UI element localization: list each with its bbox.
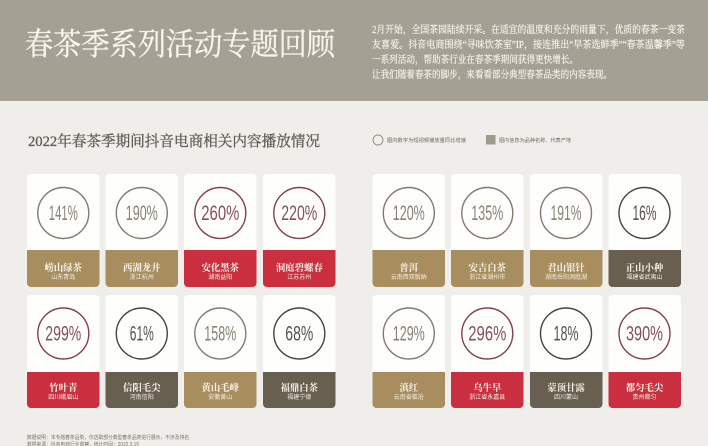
- card: 竹叶青: 竹叶青: [49, 382, 78, 394]
- card: 安吉白茶: 浙江省湖州市: [469, 273, 505, 281]
- card: 普洱: 云南西双版纳: [391, 273, 427, 281]
- card: 君山银针: 191%: [550, 202, 582, 225]
- card: 都匀毛尖: 都匀毛尖: [626, 382, 664, 394]
- card: 滇红: [372, 295, 445, 408]
- card: 安化黑茶: 260%: [201, 202, 239, 225]
- footnote: 数据说明：本专题春茶品类，仅选取部分典型春茶品类进行展示，不涉及排名: [27, 433, 189, 441]
- card: 蒙顶甘露: 四川蒙山: [554, 393, 578, 401]
- card: 安化黑茶: 安化黑茶: [202, 262, 240, 274]
- card: 洞庭碧螺春: 220%: [281, 202, 317, 225]
- card: 黄山毛峰: 安徽黄山: [208, 393, 232, 401]
- card: 西湖龙井: 西湖龙井: [123, 262, 161, 274]
- card: 信阳毛尖: 河南信阳: [130, 393, 154, 401]
- card: 乌牛早: 296%: [468, 323, 506, 346]
- card: 滇红: 云南省临沧: [394, 393, 424, 401]
- card: 福鼎白茶: 福鼎白茶: [281, 382, 319, 394]
- card: 正山小种: 正山小种: [626, 262, 664, 274]
- card: 崂山绿茶: [27, 174, 100, 287]
- card: 黄山毛峰: 黄山毛峰: [202, 382, 240, 394]
- intro paragraph: 一系列活动，帮助茶行业在春茶季期间获得更快增长。: [372, 53, 578, 66]
- card: 崂山绿茶: 山东青岛: [51, 273, 75, 281]
- card: 安化黑茶: 湖南益阳: [208, 273, 232, 281]
- card: 君山银针: [530, 174, 602, 287]
- card: 竹叶青: 299%: [45, 323, 81, 346]
- card: 都匀毛尖: 贵州都匀: [632, 393, 657, 401]
- card: 蒙顶甘露: [530, 295, 602, 408]
- card: 信阳毛尖: 信阳毛尖: [123, 382, 161, 394]
- card: 安吉白茶: [451, 174, 524, 287]
- legend text: circle: 圈内数字为短视频播放量同比增速: [387, 136, 467, 144]
- card: 乌牛早: [451, 295, 524, 408]
- card: 安吉白茶: 安吉白茶: [469, 262, 507, 274]
- card: 滇红: 129%: [393, 323, 425, 346]
- legend icon: square: [486, 135, 496, 144]
- section heading: 2022年春茶季期间抖音电商相关内容播放情况: [28, 132, 320, 150]
- card: 君山银针: 君山银针: [547, 262, 585, 274]
- header banner: [0, 0, 708, 101]
- card: 蒙顶甘露: 蒙顶甘露: [547, 382, 585, 394]
- card: 黄山毛峰: 158%: [204, 323, 236, 346]
- intro paragraph: 让我们随着春茶的脚步，来看看部分典型春茶品类的内容表现。: [372, 68, 612, 81]
- card: 西湖龙井: 190%: [126, 202, 158, 225]
- card: 福鼎白茶: 福建宁德: [287, 393, 311, 401]
- card: 普洱: 普洱: [399, 262, 419, 274]
- card: 普洱: 120%: [393, 202, 425, 225]
- card: 信阳毛尖: [106, 295, 178, 408]
- card: 洞庭碧螺春: 洞庭碧螺春: [276, 262, 323, 274]
- card: 洞庭碧螺春: [263, 174, 336, 287]
- card: 安化黑茶: [184, 174, 256, 287]
- card: 崂山绿茶: 141%: [49, 202, 78, 225]
- legend: [373, 135, 572, 145]
- card: 正山小种: [608, 174, 681, 287]
- card: 正山小种: 福建省武夷山: [626, 273, 663, 281]
- card: 安吉白茶: 135%: [471, 202, 503, 225]
- card: 洞庭碧螺春: 江苏苏州: [287, 273, 311, 281]
- card: 黄山毛峰: [184, 295, 256, 408]
- card: 西湖龙井: 浙江杭州: [130, 273, 154, 281]
- card: 都匀毛尖: [608, 295, 681, 408]
- card: 竹叶青: [27, 295, 100, 408]
- card: 福鼎白茶: [263, 295, 336, 408]
- card: 君山银针: 湖南岳阳洞庭湖: [545, 273, 587, 281]
- legend text: square: 圈内信息为品种名称、代表产地: [499, 136, 572, 144]
- card: 都匀毛尖: 390%: [626, 323, 663, 346]
- card: 竹叶青: 四川峨眉山: [48, 393, 78, 401]
- card: 普洱: [372, 174, 445, 287]
- title: 春茶季系列活动专题回顾: [25, 27, 336, 62]
- card: 信阳毛尖: 61%: [130, 323, 154, 346]
- card: 蒙顶甘露: 18%: [554, 323, 578, 346]
- card: 崂山绿茶: 崂山绿茶: [45, 262, 83, 274]
- card: 正山小种: 16%: [632, 202, 656, 225]
- card: 西湖龙井: [106, 174, 178, 287]
- card: 福鼎白茶: 68%: [285, 323, 313, 346]
- legend icon: circle: [373, 135, 383, 145]
- card: 乌牛早: 浙江省永嘉县: [469, 393, 505, 401]
- footnote: [27, 433, 189, 446]
- card: 乌牛早: 乌牛早: [473, 382, 502, 394]
- intro paragraph: [372, 23, 686, 81]
- card: 滇红: 滇红: [399, 382, 419, 394]
